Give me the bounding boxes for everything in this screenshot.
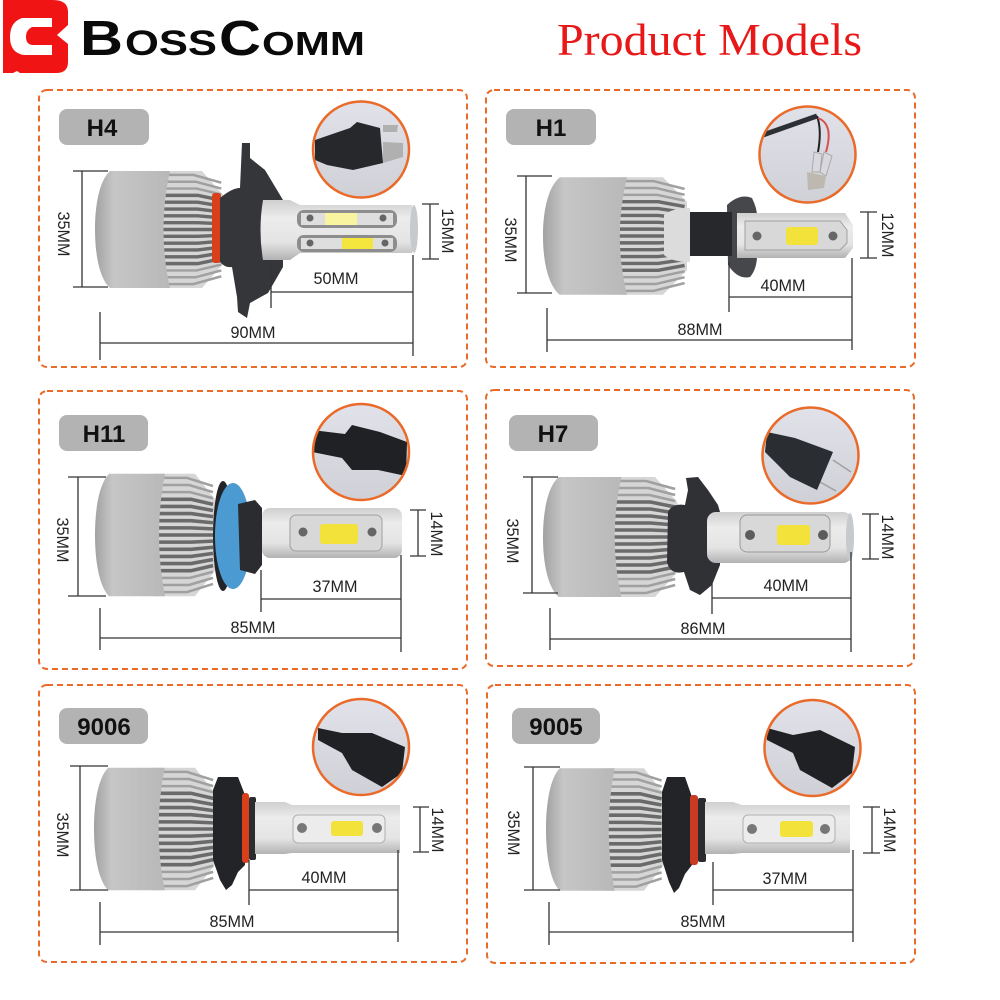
inset: 9006 connector [314, 700, 408, 794]
badge: H11 [59, 415, 148, 451]
badge: 9006: 9006 [77, 714, 131, 741]
dimensions: 9006: 40MM [302, 869, 346, 887]
dimensions: H4: 15MM [438, 209, 456, 253]
dimensions: 9006: 85MM [210, 913, 254, 931]
badge: H7 [509, 415, 598, 451]
bulb: H1 [543, 177, 853, 295]
inset ring [313, 102, 409, 198]
panel: H11 [39, 391, 467, 669]
dimensions: H7: 14MM [878, 515, 896, 559]
icon: red B mark [3, 0, 68, 73]
inset ring [313, 699, 409, 795]
dimensions: H11: 35MM [53, 518, 71, 562]
badge: H1: H1 [536, 115, 566, 142]
inset ring [764, 700, 860, 796]
inset ring [762, 408, 858, 504]
bulb: H4 [95, 143, 418, 318]
dimensions: 9005: 85MM [681, 913, 725, 931]
panel: H4 [39, 90, 467, 367]
bulb: 9006 [94, 768, 400, 890]
inset: 9005 connector [766, 701, 860, 795]
dimensions: H11: 37MM [313, 578, 357, 596]
dimensions: H1: 12MM [878, 213, 896, 257]
dimensions: 9006 [53, 766, 446, 945]
wordmark: B [80, 12, 123, 66]
dimensions: H4 [54, 171, 456, 360]
panel: 9006 [39, 685, 467, 962]
badge: H4 [59, 109, 149, 145]
badge: 9005 [512, 708, 600, 744]
inset: H7 connector [764, 408, 858, 502]
dimensions: H4: 35MM [54, 212, 72, 256]
dimensions: H7: 86MM [681, 620, 725, 638]
panel: 9005 [487, 685, 915, 963]
dimensions: H1: 40MM [761, 277, 805, 295]
logo: BossComm [3, 0, 365, 73]
inset: H1 connector [760, 108, 854, 202]
bulb: 9005 [546, 768, 850, 893]
badge: 9006 [59, 708, 148, 744]
wordmark: OSS [125, 24, 217, 63]
dimensions: H7: 40MM [764, 577, 808, 595]
dimensions: H11 [53, 477, 445, 652]
dimensions: 9005: 37MM [763, 870, 807, 888]
dimensions: 9005: 35MM [504, 811, 522, 855]
inset: H11 connector [314, 405, 408, 499]
dimensions: H11: 85MM [231, 619, 275, 637]
dimensions: 9005: 14MM [880, 808, 898, 852]
dimensions: H4: 50MM [314, 270, 358, 288]
inset: H4 connector [314, 102, 408, 196]
dimensions: H7 [503, 477, 896, 652]
wordmark: OMM [262, 25, 365, 62]
badge: H1 [506, 109, 596, 145]
dimensions: H7: 35MM [503, 519, 521, 563]
inset ring [760, 106, 856, 202]
dimensions: 9006: 14MM [428, 808, 446, 852]
badge: H11: H11 [83, 421, 125, 448]
badge: 9005: 9005 [529, 714, 583, 741]
badge: H7: H7 [538, 421, 568, 448]
wordmark [80, 12, 365, 66]
inset ring [313, 404, 409, 500]
badge: H4: H4 [87, 115, 118, 142]
panel: H1 [486, 90, 915, 367]
dimensions: H1: 88MM [678, 321, 722, 339]
dimensions: H4: 90MM [231, 324, 275, 342]
dimensions: 9006: 35MM [53, 813, 71, 857]
wordmark: C [219, 12, 261, 66]
dimensions: H1: 35MM [501, 218, 519, 262]
dimensions: 9005 [504, 767, 898, 945]
bulb: H7 [543, 477, 854, 597]
panel: H7 [486, 390, 914, 666]
dimensions: H11: 14MM [427, 512, 445, 556]
dimensions: H1 [501, 176, 896, 352]
title: Product Models [557, 15, 862, 65]
bulb: H11 [95, 474, 402, 596]
